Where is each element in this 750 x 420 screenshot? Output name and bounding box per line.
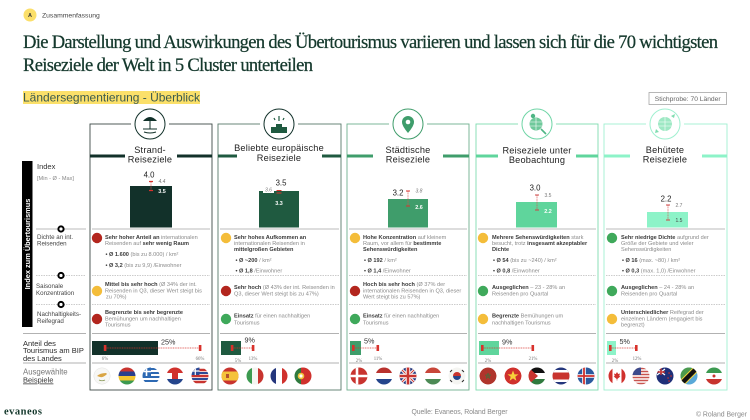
flag: Mauritius: [118, 368, 136, 384]
density text: Dichte: [492, 247, 509, 253]
seasonal text: [350, 282, 461, 300]
heading: [234, 143, 324, 163]
icon: monuments: [264, 109, 294, 139]
panel: Reiseziele unter Beobachtung: [476, 105, 598, 390]
index bar: 2.6: [415, 205, 423, 211]
maturity text: einzelnen Ländern (engagiert bis: [621, 316, 703, 322]
seasonal text: [221, 285, 335, 298]
density text: Mehrere Sehenswürdigkeiten stark: [492, 235, 584, 241]
density text: • Ø 16 (max. ~80) / km²: [622, 258, 680, 264]
section badge: [24, 8, 100, 22]
maturity text: [478, 314, 564, 326]
maturity text: Tourismus: [363, 320, 389, 326]
GDP bar: 21%: [529, 357, 537, 362]
index bar: [516, 184, 557, 228]
flag: Denmark: [350, 368, 368, 384]
panel: Städtische Reiseziele: [347, 105, 469, 390]
density text: Größe der Gebiete und vieler: [621, 241, 694, 247]
maturity text: [607, 310, 704, 328]
density text: • Ø 1,4 /Einwohner: [364, 268, 411, 274]
GDP bar: [350, 336, 382, 364]
sample size box: Stichprobe: 70 Länder: [655, 96, 721, 103]
seasonal text: zu 70%): [106, 294, 127, 300]
heading: Beobachtung: [509, 155, 565, 165]
flag: Greece: [142, 368, 160, 382]
GDP bar: 5%: [235, 359, 241, 364]
density text: Sehenswürdigkeiten: [621, 247, 671, 253]
flag: Hungary: [425, 368, 441, 384]
GDP bar: 2%: [612, 359, 618, 364]
GDP bar: 5%: [364, 336, 375, 346]
flag: Costa Rica: [552, 368, 570, 384]
flag: Vietnam: [504, 368, 522, 384]
row labels: Reisenden: [37, 240, 67, 248]
heading: Strand-: [134, 145, 166, 155]
index bar: 3.3: [275, 201, 283, 207]
row labels: Saisonale: [36, 283, 64, 290]
index bar: 4.4: [159, 179, 166, 185]
maturity text: nachhaltigen Tourismus: [492, 320, 551, 326]
density text: [92, 233, 198, 269]
seasonal text: Reisenden pro Quartal: [492, 292, 548, 298]
section badge: A: [28, 13, 32, 19]
tourism share label: Anteil des: [23, 339, 56, 348]
density text: Reisenden auf sehr wenig Raum: [105, 241, 189, 247]
density text: [478, 233, 588, 274]
heading: Behütete: [646, 145, 684, 155]
icon: beach umbrella: [135, 109, 165, 139]
index bar: 3.5: [545, 193, 552, 199]
density text: • Ø 0,8 /Einwohner: [493, 268, 540, 274]
GDP bar: [607, 337, 641, 364]
density text: • Ø 54 (bis zu ~240) / km²: [493, 258, 557, 264]
density text: Hohe Konzentration auf kleinem: [363, 235, 447, 241]
flag: Cyprus: [94, 368, 110, 384]
seasonal text: Ausgeglichen – 24 - 28% an: [621, 285, 694, 291]
density text: Sehr hoher Anteil an internationalen: [105, 235, 198, 241]
maturity text: Tourismus: [105, 322, 131, 328]
index bar: 2.2: [661, 194, 671, 204]
heading: Reiseziele: [386, 154, 430, 164]
GDP bar: 12%: [633, 357, 641, 362]
maturity text: Unterschiedlicher Reifegrad der: [621, 310, 704, 316]
GDP bar: 6%: [102, 357, 108, 362]
density text: • Ø 0,3 (max. 1,0) /Einwohner: [622, 268, 696, 274]
row labels: Reifegrad: [37, 318, 64, 325]
icon: globe with leaves: [650, 109, 680, 139]
seasonal text: [607, 285, 694, 298]
index bar: [388, 188, 428, 228]
seasonal text: Reisenden in Q3, dieser Wert steigt bis: [105, 288, 202, 294]
density text: besucht, trotz insgesamt akzeptabler: [492, 241, 588, 247]
heading: Reiseziele: [257, 153, 301, 163]
seasonal text: internationalen Reisenden in Q3, dieser: [363, 288, 461, 294]
heading: [386, 145, 430, 164]
GDP bar: 25%: [161, 338, 176, 346]
index bar: [647, 194, 688, 228]
GDP bar: [92, 338, 204, 362]
panel: Strand-Reiseziele: [90, 105, 212, 390]
seasonal text: [92, 282, 202, 300]
index bar: 4.0: [144, 170, 155, 180]
row labels: Konzentration: [36, 290, 75, 297]
title: [23, 32, 719, 76]
density text: Sehenswürdigkeiten: [363, 247, 418, 253]
maturity text: [350, 314, 439, 326]
heading: [128, 145, 172, 164]
flag: New Zealand: [656, 368, 674, 384]
seasonal text: Mittel bis sehr hoch (Ø 34% der int.: [105, 282, 197, 288]
seasonal text: Ausgeglichen – 23 - 28% an: [492, 285, 565, 291]
flag: Morocco: [480, 368, 496, 384]
maturity text: Begrenzte Bemühungen um: [492, 314, 564, 320]
source: Quelle: Evaneos, Roland Berger: [412, 409, 508, 416]
flag: Hawaii: [192, 368, 208, 384]
index bar: 3.6: [265, 188, 272, 194]
flag: Italy: [246, 368, 264, 384]
flag: Croatia: [167, 368, 183, 384]
density text: [221, 233, 307, 274]
flag: Netherlands: [376, 368, 392, 384]
maturity text: [221, 314, 310, 326]
maturity text: Einsatz für einen nachhaltigen: [363, 314, 439, 320]
index bar: 2.7: [676, 203, 683, 209]
icon: magnifier over globe: [522, 109, 552, 139]
section badge: Zusammenfassung: [42, 12, 100, 20]
maturity text: Einsatz für einen nachhaltigen: [234, 314, 310, 320]
examples label: [23, 363, 86, 384]
density text: Sehr niedrige Dichte aufgrund der: [621, 235, 709, 241]
sample size box: [649, 92, 726, 104]
title: Reiseziele der Welt in 5 Cluster unterteilen: [23, 55, 314, 76]
flag: Tanzania: [680, 368, 698, 384]
copyright: © Roland Berger: [696, 410, 748, 418]
GDP bar: 5%: [620, 337, 630, 346]
seasonal text: Reisenden pro Quartal: [621, 292, 677, 298]
GDP bar: [479, 338, 537, 364]
index bar: 1.5: [676, 218, 683, 224]
flag: Iceland: [578, 368, 594, 384]
tourism share label: [23, 334, 86, 363]
GDP bar: [221, 336, 257, 364]
flag: Canada: [608, 368, 626, 384]
icon: map pin: [393, 109, 423, 139]
density text: Raum, vor allem für bestimmte: [363, 241, 441, 247]
panel: Behütete Reiseziele: [604, 105, 727, 390]
density text: internationalen Reisenden in: [234, 241, 305, 247]
heading: Reiseziele: [643, 154, 687, 164]
density text: mittelgroßen Gebieten: [234, 247, 294, 253]
flag: South Korea: [448, 368, 466, 384]
seasonal text: Q3, dieser Wert steigt bis zu 47%): [234, 292, 319, 298]
tourism share label: des Landes: [23, 354, 62, 363]
GDP bar: 66%: [196, 357, 204, 362]
vertical axis label: Index zum Übertourismus: [23, 199, 32, 289]
index bar: 3.5: [276, 178, 287, 188]
index bar: 2.2: [544, 209, 552, 215]
heading: [502, 146, 572, 165]
row labels: Dichte an int.: [37, 234, 73, 241]
heading: [643, 145, 687, 164]
GDP bar: 2%: [356, 359, 362, 364]
examples label: Beispiele: [23, 376, 53, 384]
flag: Iran: [706, 368, 722, 384]
density text: • Ø 1.600 (bis zu 8.000) / km²: [106, 252, 178, 258]
GDP bar: 13%: [249, 357, 257, 362]
row labels: [36, 162, 86, 325]
seasonal text: Hoch bis sehr hoch (Ø 37% der: [363, 282, 445, 288]
row labels: Index: [37, 162, 56, 171]
subtitle highlight: Ländersegmentierung - Überblick: [23, 92, 200, 104]
density text: [350, 233, 447, 274]
index bar: [130, 170, 172, 228]
index bar: 3.5: [158, 189, 166, 195]
index bar: 3.0: [530, 184, 541, 192]
flag: Portugal: [294, 368, 312, 384]
vertical axis label: [22, 161, 32, 327]
row labels: Nachhaltigkeits-: [37, 311, 81, 318]
GDP bar: 9%: [244, 336, 255, 344]
panel: Beliebte europäische Reiseziele: [218, 105, 341, 390]
density text: [607, 233, 709, 274]
maturity text: [92, 310, 183, 328]
title: Die Darstellung und Auswirkungen des Übertourismus variieren und lassen sich für die 70 wichtigsten: [23, 32, 719, 53]
maturity text: Begrenzte bis sehr begrenzte: [105, 310, 183, 316]
logo: evaneos: evaneos: [4, 406, 42, 418]
examples label: Ausgewählte: [23, 368, 68, 376]
GDP bar: 9%: [502, 338, 513, 346]
maturity text: begrenzt): [621, 322, 645, 328]
density text: • Ø ~200 / km²: [236, 258, 272, 264]
index bar: 3.8: [416, 188, 423, 194]
maturity text: Tourismus: [234, 320, 260, 326]
heading: Reiseziele unter: [502, 146, 572, 156]
seasonal text: Wert steigt bis zu 57%): [363, 294, 421, 300]
density text: • Ø 1,8 /Einwohner: [236, 268, 282, 274]
tourism share label: Tourismus am BIP: [23, 346, 84, 355]
flag: United States: [632, 368, 650, 384]
heading: Städtische: [386, 145, 430, 155]
seasonal text: [478, 285, 565, 298]
flag: Jordan: [528, 368, 545, 384]
row labels: [Min - Ø - Max]: [37, 176, 74, 182]
flag: United Kingdom: [400, 368, 416, 384]
index bar: [259, 178, 299, 228]
seasonal text: Sehr hoch (Ø 43% der int. Reisenden in: [234, 285, 335, 291]
flag: Spain: [222, 368, 238, 384]
density text: • Ø 192 / km²: [364, 258, 397, 264]
index bar: 3.2: [393, 188, 403, 198]
heading: Reiseziele: [128, 154, 172, 164]
density text: Sehr hohes Aufkommen an: [234, 235, 307, 241]
maturity text: Bemühungen um nachhaltigen: [105, 316, 181, 322]
flag: France: [270, 368, 288, 384]
heading: Beliebte europäische: [234, 143, 324, 153]
GDP bar: 2%: [485, 359, 491, 364]
GDP bar: 11%: [374, 357, 382, 362]
density text: • Ø 3,2 (bis zu 9,9) /Einwohner: [106, 263, 182, 269]
